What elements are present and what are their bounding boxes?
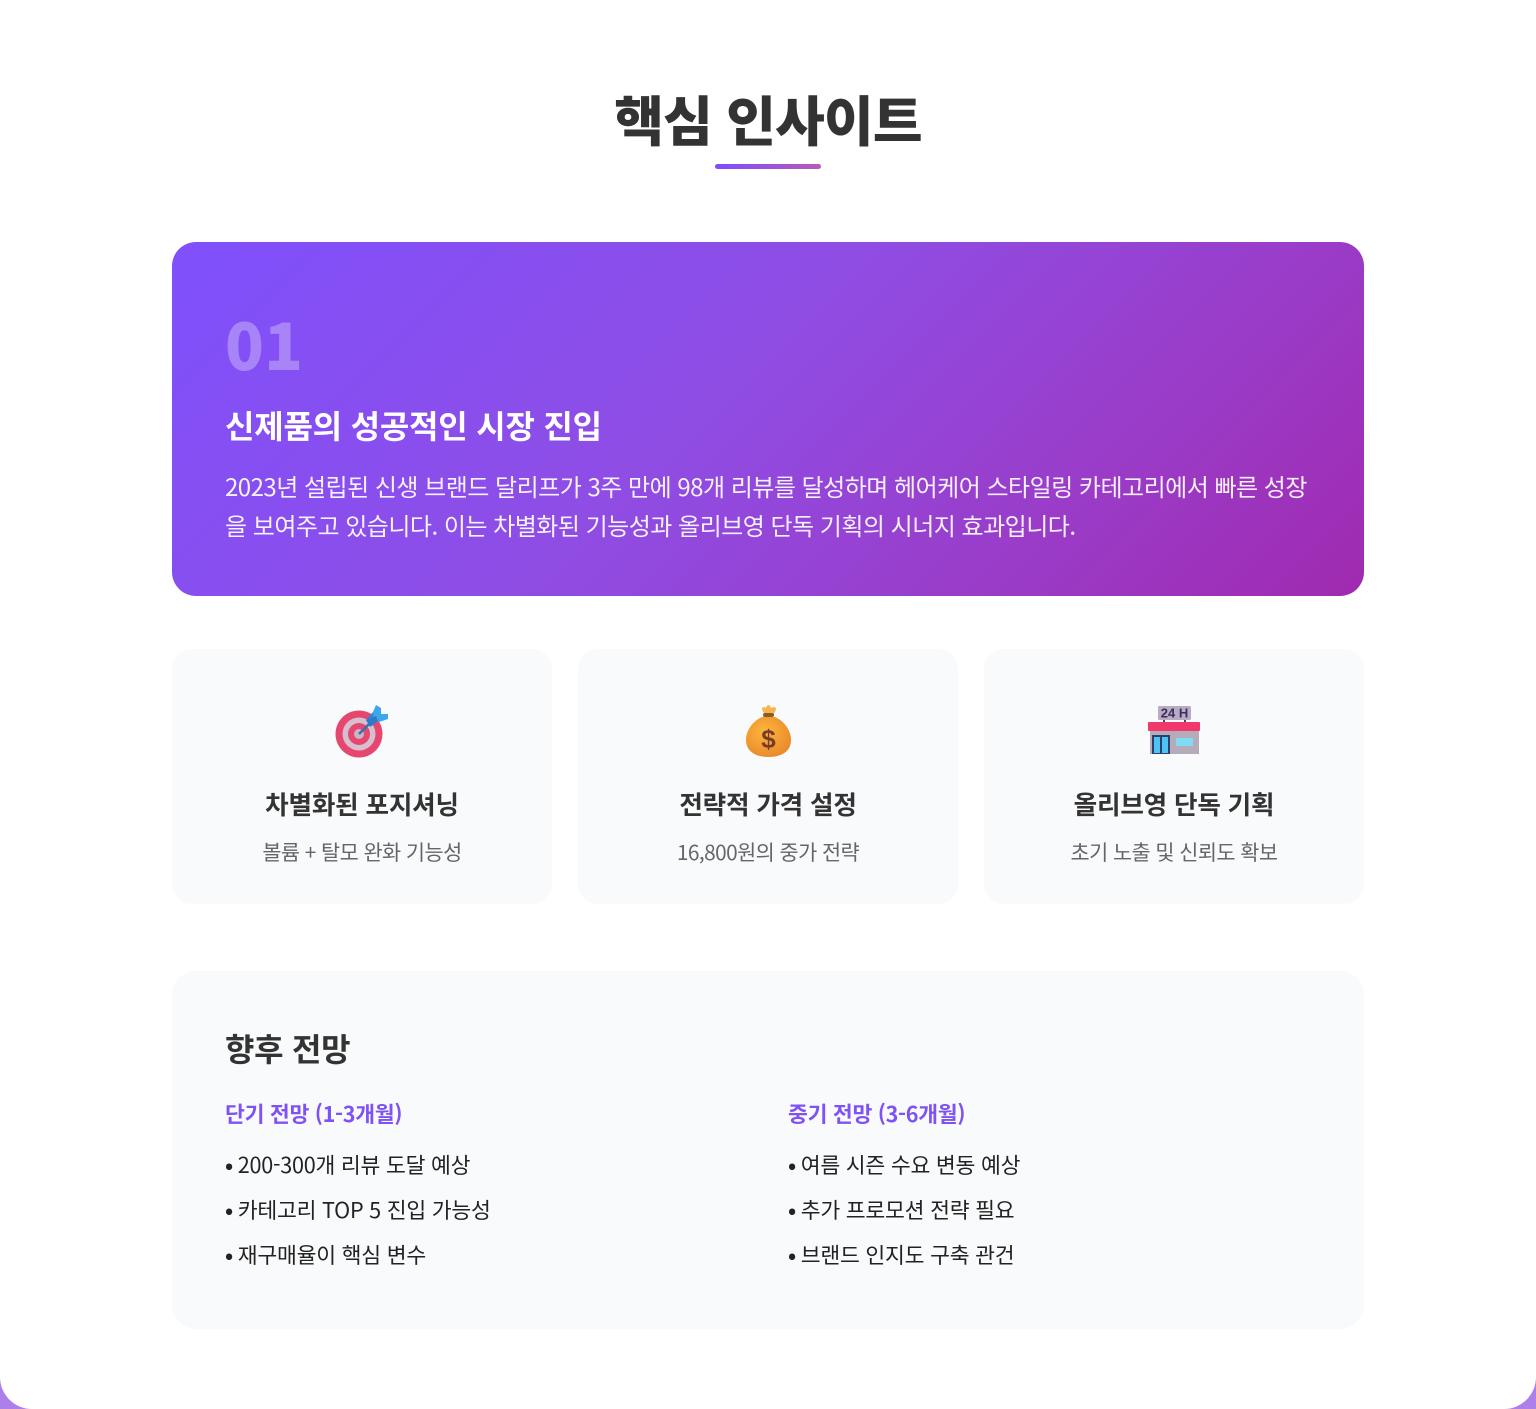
insight description: [225, 468, 1307, 542]
insight heading: 신제품의 성공적인 시장 진입: [225, 402, 602, 448]
mid-term list: • 여름 시즌 수요 변동 예상: [788, 1149, 1020, 1180]
card heading: 전략적 가격 설정: [679, 785, 857, 822]
outlook heading: 향후 전망: [225, 1025, 350, 1071]
short-term list: • 200-300개 리뷰 도달 예상: [225, 1149, 470, 1180]
insight description: 2023년 설립된 신생 브랜드 달리프가 3주 만에 98개 리뷰를 달성하며 헤어케어 스타일링 카테고리에서 빠른 성장: [225, 468, 1307, 502]
title underline: [715, 164, 821, 169]
card heading: 올리브영 단독 기획: [1074, 785, 1274, 822]
icon: money bag: [746, 705, 791, 757]
card heading: 차별화된 포지셔닝: [265, 785, 459, 822]
icon: money bag: $: [761, 724, 776, 754]
icon: convenience store: [1148, 706, 1200, 754]
card text: 초기 노출 및 신뢰도 확보: [1071, 836, 1277, 866]
short-term heading: 단기 전망 (1-3개월): [225, 1098, 402, 1129]
panel: outlook: [172, 971, 1364, 1329]
short-term list: • 재구매율이 핵심 변수: [225, 1239, 426, 1270]
mid-term list: • 브랜드 인지도 구축 관건: [788, 1239, 1014, 1270]
card text: 16,800원의 중가 전략: [677, 836, 859, 866]
insight description: 을 보여주고 있습니다. 이는 차별화된 기능성과 올리브영 단독 기획의 시너지 효과입니다.: [225, 506, 1076, 542]
short-term list: [225, 1149, 491, 1270]
panel: pricing card: [578, 649, 958, 904]
short-term column: [225, 1098, 491, 1270]
mid-term heading: 중기 전망 (3-6개월): [788, 1098, 965, 1129]
mid-term list: • 추가 프로모션 전략 필요: [788, 1194, 1014, 1225]
title: 핵심 인사이트: [614, 78, 922, 157]
panel: insight 01: [172, 242, 1364, 596]
mid-term column: [788, 1098, 1020, 1270]
short-term list: • 카테고리 TOP 5 진입 가능성: [225, 1194, 491, 1225]
card text: 볼륨 + 탈모 완화 기능성: [262, 836, 462, 866]
icon: convenience store: 24 H: [1161, 706, 1188, 720]
number 01: 01: [225, 297, 303, 389]
icon: target with dart: [336, 705, 388, 758]
panel: exclusive card: [984, 649, 1364, 904]
panel: positioning card: [172, 649, 552, 904]
mid-term list: [788, 1149, 1020, 1270]
